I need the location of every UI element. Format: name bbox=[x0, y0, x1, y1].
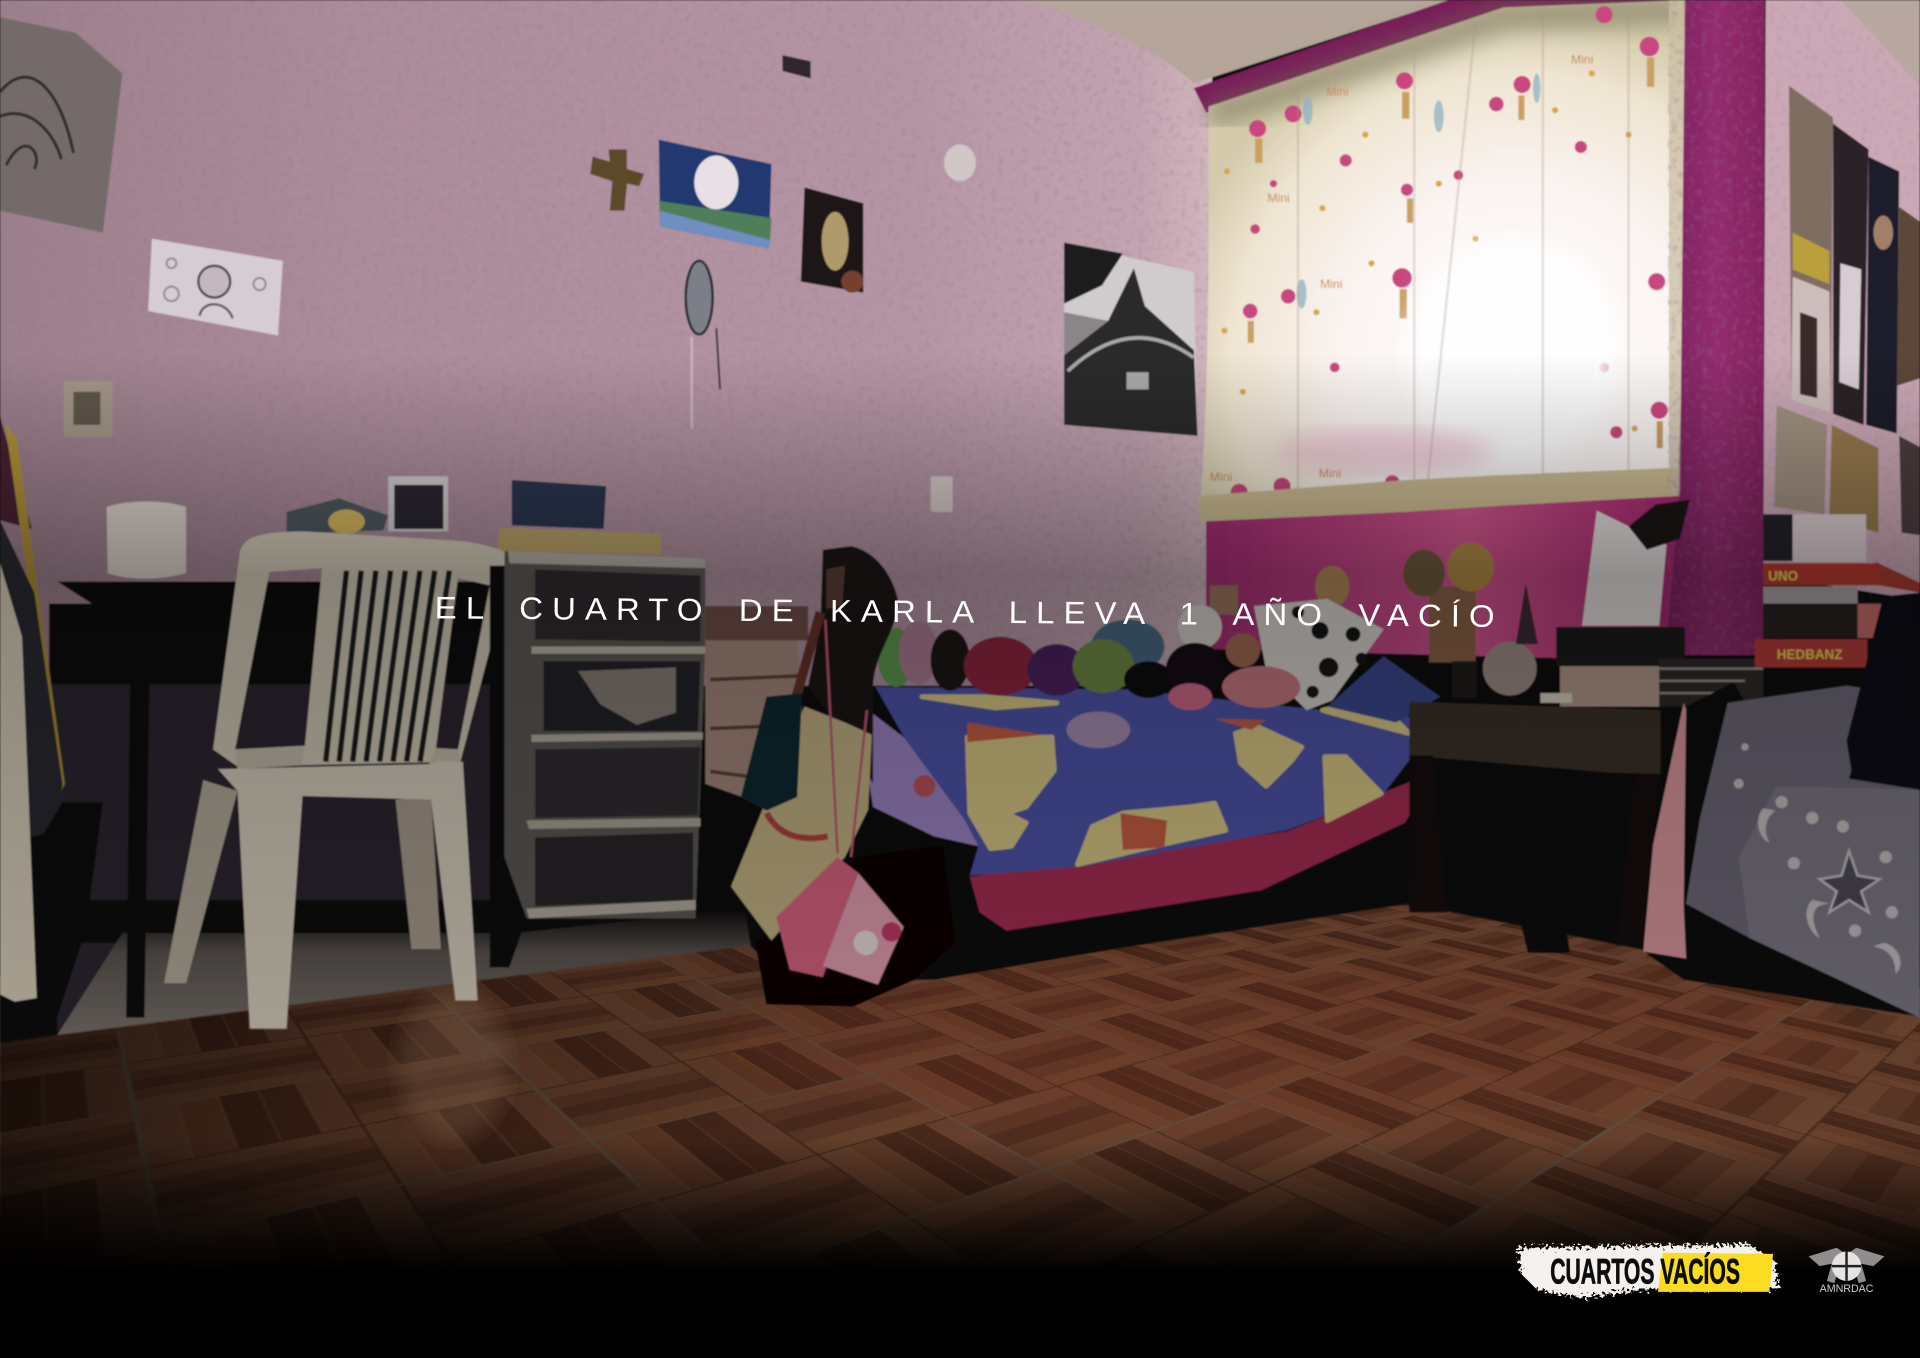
tote bag bbox=[731, 707, 872, 940]
panda bbox=[1166, 605, 1224, 697]
chair back bbox=[213, 531, 512, 767]
bags hanging on the bed bbox=[731, 546, 955, 1007]
black bag under bbox=[756, 845, 955, 1007]
dream catcher bbox=[686, 261, 720, 429]
posters on right wall bbox=[1774, 86, 1920, 535]
Monopoly box bbox=[1763, 587, 1858, 604]
black bin bbox=[0, 802, 103, 1041]
warm sheen on right floor bbox=[722, 955, 1849, 1127]
chair slats bbox=[326, 571, 449, 762]
red strap bbox=[767, 813, 828, 838]
bear print bbox=[922, 697, 1409, 865]
salmon box edge bbox=[1858, 604, 1883, 638]
bed skirt bbox=[970, 780, 1429, 931]
UNO box bbox=[1763, 563, 1880, 585]
curtain hem bbox=[1199, 468, 1678, 522]
cream towel bbox=[0, 563, 37, 1002]
cow print pillow bbox=[1254, 599, 1384, 710]
purse strap bbox=[825, 620, 867, 857]
lavender sheet corner bbox=[868, 714, 978, 846]
wall ornament bbox=[944, 144, 976, 181]
black box on stack bbox=[1763, 514, 1793, 561]
Eiffel tower canvas bbox=[1064, 242, 1198, 436]
room backdrop bbox=[0, 0, 1920, 1043]
teddy bears bbox=[1403, 542, 1494, 596]
clothes on far left bbox=[0, 416, 103, 1041]
tissue roll bbox=[107, 501, 186, 579]
fabric hanging top left bbox=[0, 17, 122, 233]
dark box bbox=[1763, 604, 1858, 638]
tote handle bbox=[796, 612, 820, 698]
magenta fascia above window bbox=[1194, 0, 1687, 113]
white box on stack bbox=[1793, 514, 1866, 562]
curtain print bbox=[1231, 6, 1668, 501]
dark lower wall behind desk bbox=[49, 604, 504, 1035]
hanging black garment bbox=[808, 546, 899, 784]
stack of books bbox=[1659, 659, 1763, 707]
dark jacket bbox=[0, 520, 62, 838]
curtain bbox=[1199, 0, 1687, 522]
desk bbox=[58, 582, 490, 1018]
curtain folds bbox=[1298, 5, 1629, 505]
garment face patch bbox=[827, 566, 845, 609]
black plaque bbox=[801, 187, 863, 293]
magenta wall under window bbox=[1206, 465, 1680, 661]
plastic chair bbox=[164, 531, 512, 1029]
light switch bbox=[64, 381, 113, 437]
crucifix bbox=[590, 149, 644, 211]
emblem label: AMNRDAC bbox=[1820, 1283, 1874, 1295]
plush toys bbox=[878, 542, 1494, 710]
lighter blanket seat bbox=[1739, 786, 1920, 1018]
orange print patches bbox=[967, 719, 1266, 850]
wooden dresser bbox=[705, 606, 808, 820]
curtain Mini labels bbox=[1210, 53, 1593, 484]
pink glow low on curtain bbox=[1273, 429, 1494, 473]
logo wordmark: CUARTOS VACÍOS bbox=[1550, 1251, 1740, 1291]
emblem wings bbox=[1809, 1248, 1884, 1283]
black feather bbox=[1629, 500, 1690, 550]
parquet floor in perspective bbox=[0, 903, 1920, 1263]
curtain Mini labels: Mini bbox=[1571, 53, 1593, 67]
boots under nightstand bbox=[1457, 784, 1570, 953]
Hedbanz box: HEDBANZ bbox=[1777, 647, 1843, 662]
grey blanket bbox=[1686, 686, 1920, 1018]
doll bbox=[1168, 633, 1300, 710]
floor shading bbox=[0, 894, 1920, 1358]
star blanket armchair bbox=[1684, 593, 1920, 1018]
child's drawing bbox=[148, 239, 283, 336]
burgundy garment bbox=[0, 416, 32, 529]
yellow strip bbox=[5, 422, 65, 796]
chair front legs bbox=[218, 762, 478, 1029]
dark blue bag bbox=[741, 693, 802, 811]
curtain ladders bbox=[1237, 58, 1663, 519]
desk trinkets bbox=[287, 476, 661, 555]
muddy top of curtain bbox=[1209, 10, 1685, 116]
magenta pillar bbox=[1665, 0, 1766, 655]
curtain right edge bbox=[1669, 0, 1686, 496]
fabric drawing bbox=[0, 77, 73, 169]
BK sticker bbox=[782, 55, 811, 78]
emblem disc bbox=[1832, 1251, 1861, 1281]
lavender print disc bbox=[1067, 711, 1130, 748]
items on nightstand bbox=[1452, 583, 1763, 707]
UNO box: UNO bbox=[1768, 568, 1798, 583]
curtain small stars bbox=[1221, 70, 1638, 493]
curtain Mini labels: Mini bbox=[1210, 470, 1232, 484]
stars and moons bbox=[1734, 743, 1901, 973]
curtain blue trees bbox=[1297, 73, 1540, 309]
red flap bbox=[1876, 562, 1920, 593]
curtain Mini labels: Mini bbox=[1319, 467, 1341, 481]
blue pillow bbox=[1327, 656, 1440, 722]
back wall bbox=[0, 0, 1212, 686]
chair rear legs bbox=[164, 780, 441, 983]
bedspread bbox=[868, 687, 1412, 876]
wall socket bbox=[931, 476, 953, 512]
chair reflection on floor bbox=[398, 992, 508, 1139]
bright window glow bbox=[1408, 239, 1616, 459]
headline: EL CUARTO DE KARLA LLEVA 1 AÑO VACÍO bbox=[435, 590, 1504, 634]
Cuartos Vacíos logo bbox=[1518, 1244, 1778, 1298]
starry picture bbox=[659, 140, 771, 249]
dark cushion bbox=[1847, 593, 1920, 790]
yellow highlight bbox=[1658, 1253, 1773, 1292]
Hedbanz box bbox=[1755, 639, 1867, 667]
curtain Mini labels: Mini bbox=[1267, 191, 1290, 205]
chair seat bbox=[235, 746, 460, 769]
light floor tile under desk bbox=[58, 909, 751, 1035]
headboard and heart bbox=[1210, 566, 1476, 662]
white board bbox=[1582, 511, 1667, 626]
pink cloth bbox=[1643, 703, 1691, 959]
right wall bbox=[1763, 0, 1920, 600]
pink purse bbox=[776, 857, 858, 977]
nightstand bbox=[1409, 702, 1660, 953]
plastic drawers bbox=[490, 551, 705, 967]
curtain Mini labels: Mini bbox=[1326, 85, 1349, 99]
curtain Mini labels: Mini bbox=[1320, 277, 1342, 291]
white brush stroke bbox=[1518, 1244, 1778, 1298]
stack of board games bbox=[1755, 514, 1920, 667]
black sofa body bbox=[1684, 682, 1777, 983]
AMNRDAC emblem bbox=[1809, 1248, 1884, 1295]
right ceiling corner bbox=[1840, 0, 1920, 86]
ceiling bbox=[1025, 0, 1451, 83]
